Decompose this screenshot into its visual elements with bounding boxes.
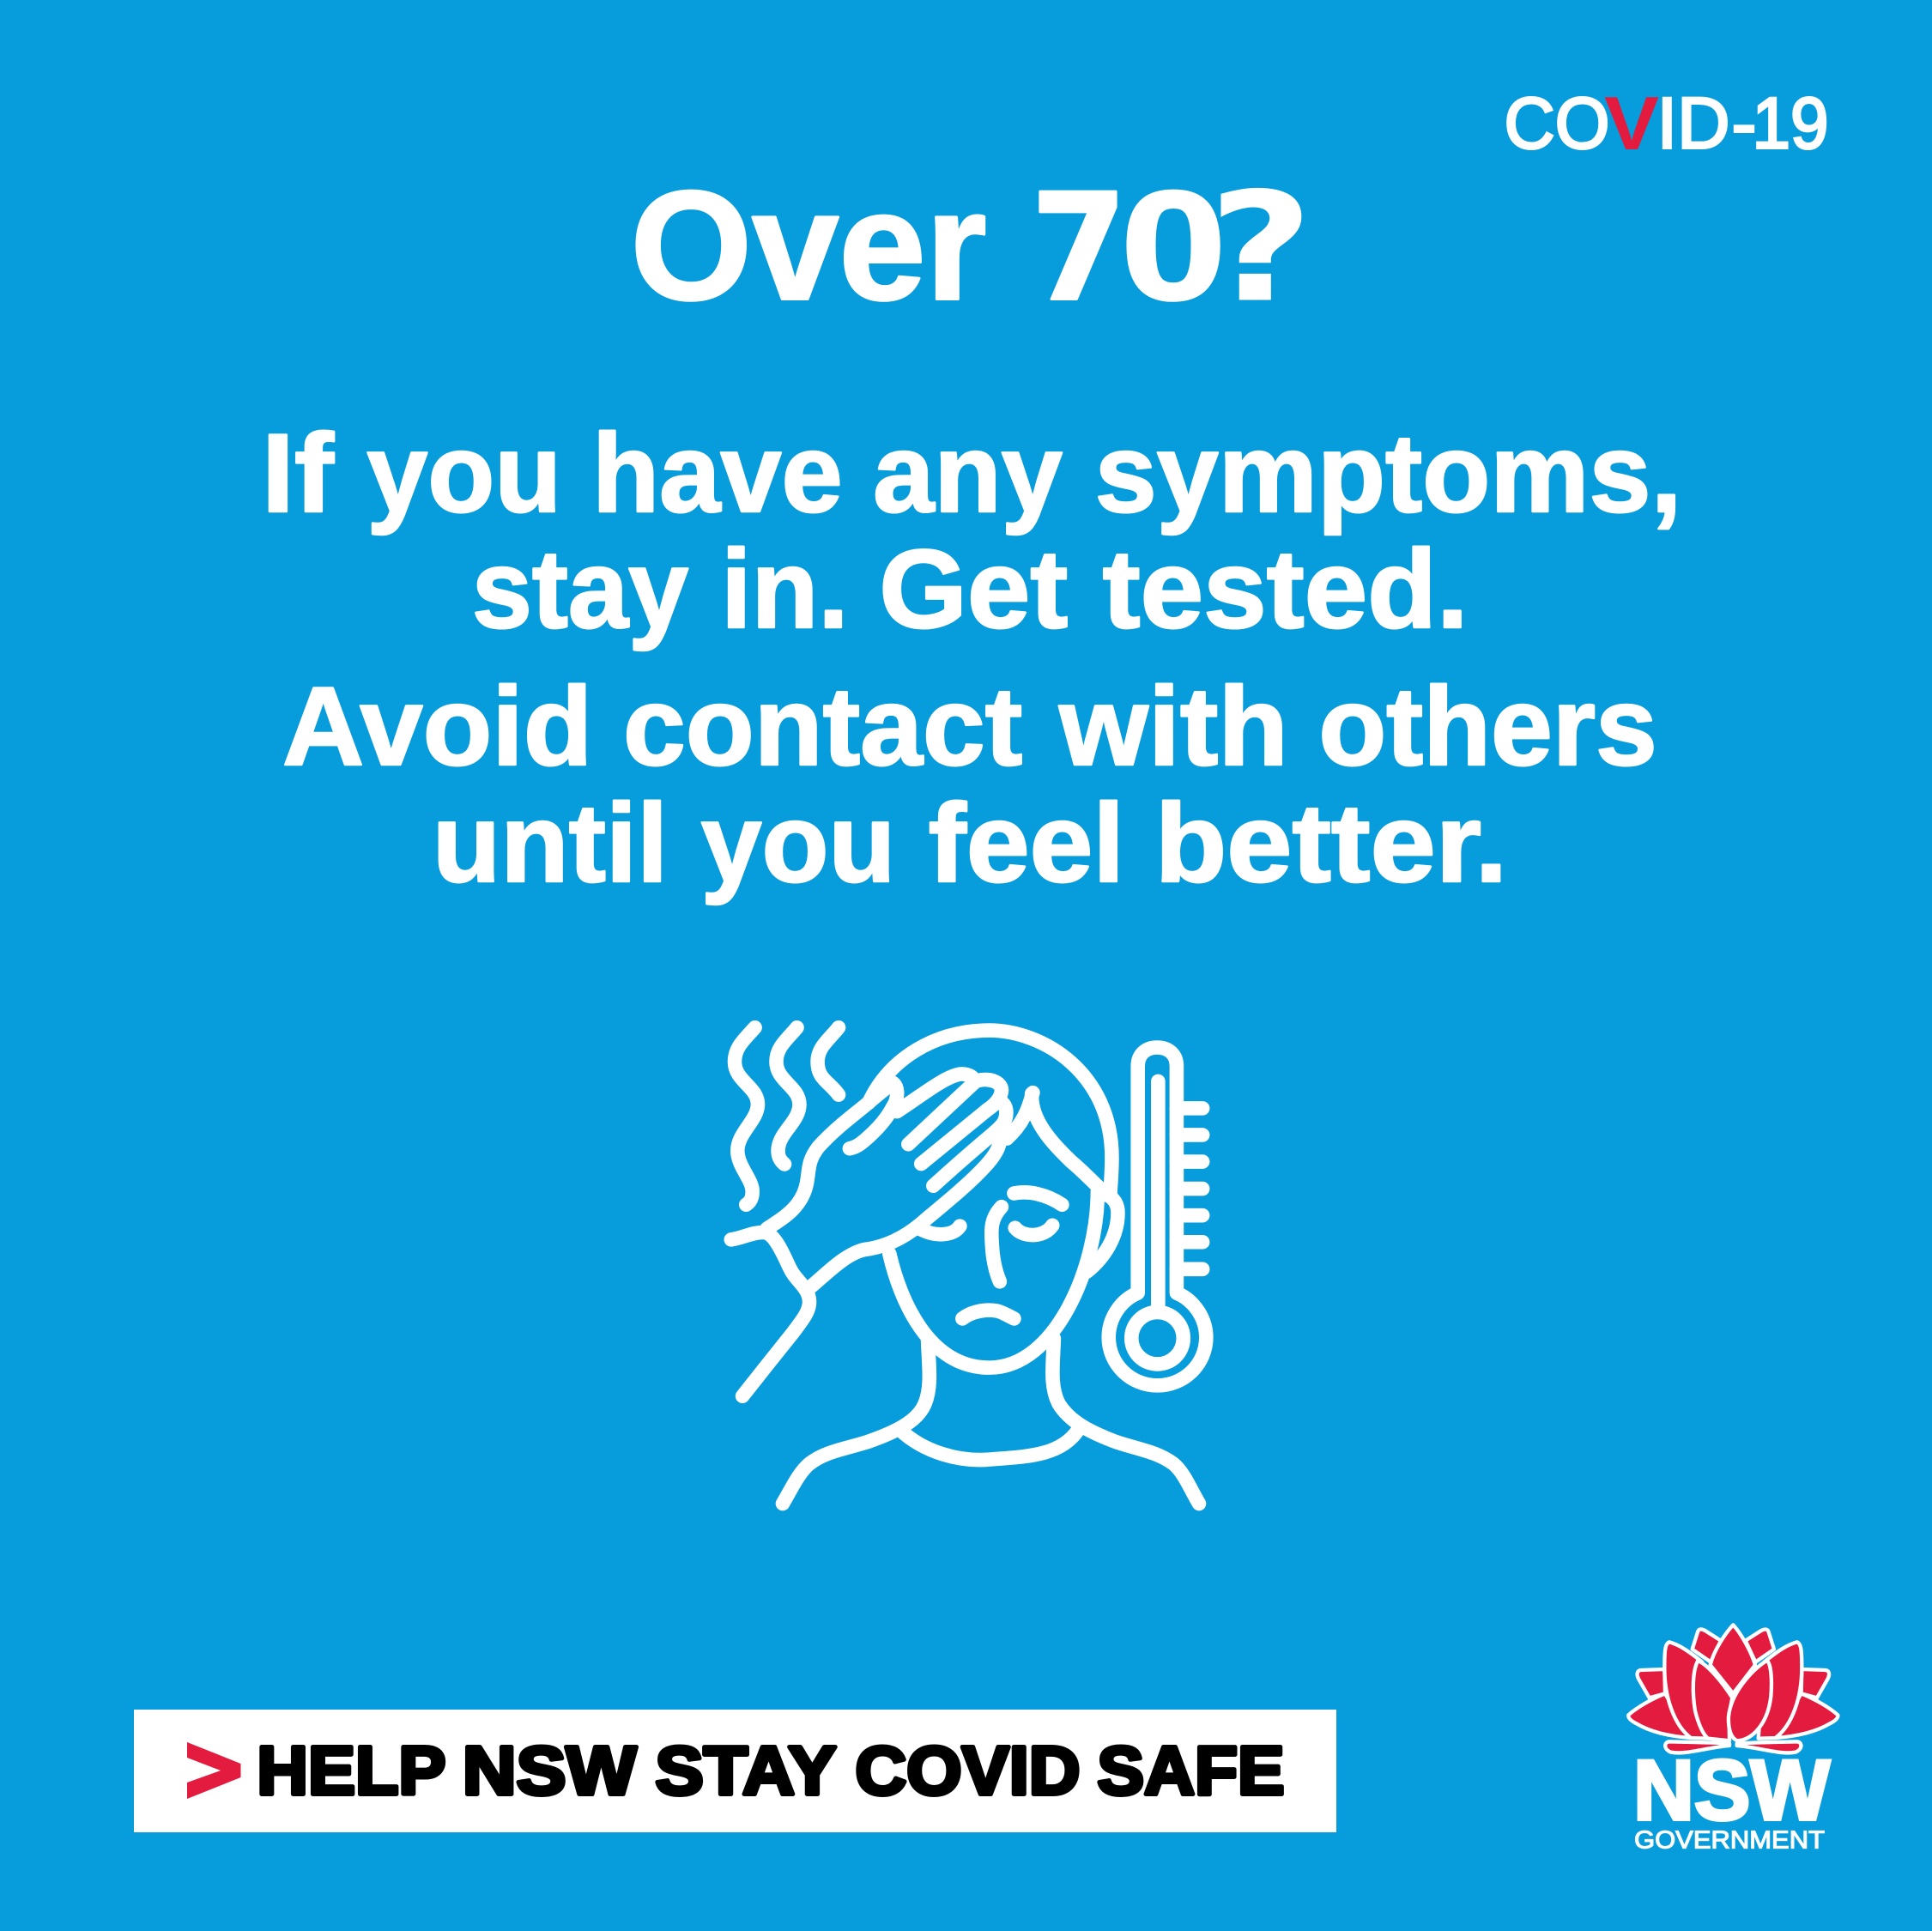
message text	[262, 410, 1681, 905]
line 2	[472, 526, 1469, 651]
icon: face features	[922, 1192, 1062, 1318]
title	[630, 160, 1313, 336]
COVID-19 wordmark: V	[1604, 81, 1659, 166]
icon: thermometer	[1109, 1047, 1206, 1385]
line 1	[262, 410, 1681, 536]
line 3	[282, 663, 1657, 789]
COVID-19 wordmark	[1504, 81, 1828, 166]
logo: waratah flower	[1628, 1625, 1838, 1752]
line 1: you	[366, 410, 561, 536]
line 1: If	[262, 410, 335, 536]
title: ?	[1208, 160, 1313, 336]
icon: person with fever and thermometer	[731, 1027, 1206, 1504]
icon: hand on forehead	[731, 1074, 1006, 1396]
line 1: have	[592, 410, 843, 536]
line 3: Avoid	[282, 663, 592, 789]
title: 0	[1121, 160, 1226, 333]
banner text: COVID	[855, 1732, 1080, 1809]
COVID-19 wordmark: CO	[1504, 82, 1610, 163]
logo: NSW letters: NSW	[1633, 1742, 1831, 1837]
icon: red chevron	[187, 1742, 240, 1799]
banner text: NSW	[463, 1732, 637, 1809]
line 1: symptoms,	[1095, 410, 1682, 536]
banner: help NSW stay COVID safe	[134, 1710, 1336, 1832]
icon: head and hair	[869, 1031, 1117, 1368]
COVID-19 wordmark: ID	[1656, 82, 1730, 163]
icon: neck and shoulders	[783, 1339, 1199, 1504]
line 4: feel	[929, 780, 1124, 905]
COVID-19 wordmark: 19	[1753, 82, 1828, 163]
line 2: in.	[721, 526, 849, 651]
logo: GOVERNMENT: GOVERNMENT	[1634, 1826, 1825, 1854]
line 4: better.	[1155, 780, 1507, 905]
banner text	[257, 1732, 1284, 1809]
line 3: contact	[623, 663, 1022, 789]
banner text: SAFE	[1097, 1732, 1284, 1809]
banner text: STAY	[656, 1732, 836, 1809]
line 3: others	[1318, 663, 1657, 789]
line 4: you	[701, 780, 895, 905]
logo: NSW Government	[1628, 1625, 1838, 1854]
line 4: until	[433, 780, 668, 905]
COVID-19 wordmark: -	[1732, 82, 1756, 163]
line 2: Get	[879, 526, 1068, 651]
icon: heat waves	[735, 1027, 839, 1205]
line 2: tested.	[1103, 526, 1469, 651]
line 2: stay	[472, 526, 688, 651]
title: 7	[1031, 161, 1127, 335]
line 1: any	[873, 410, 1063, 536]
banner text: HELP	[257, 1732, 445, 1809]
title: Over	[630, 160, 987, 333]
line 4	[433, 780, 1507, 905]
line 3: with	[1058, 663, 1288, 789]
